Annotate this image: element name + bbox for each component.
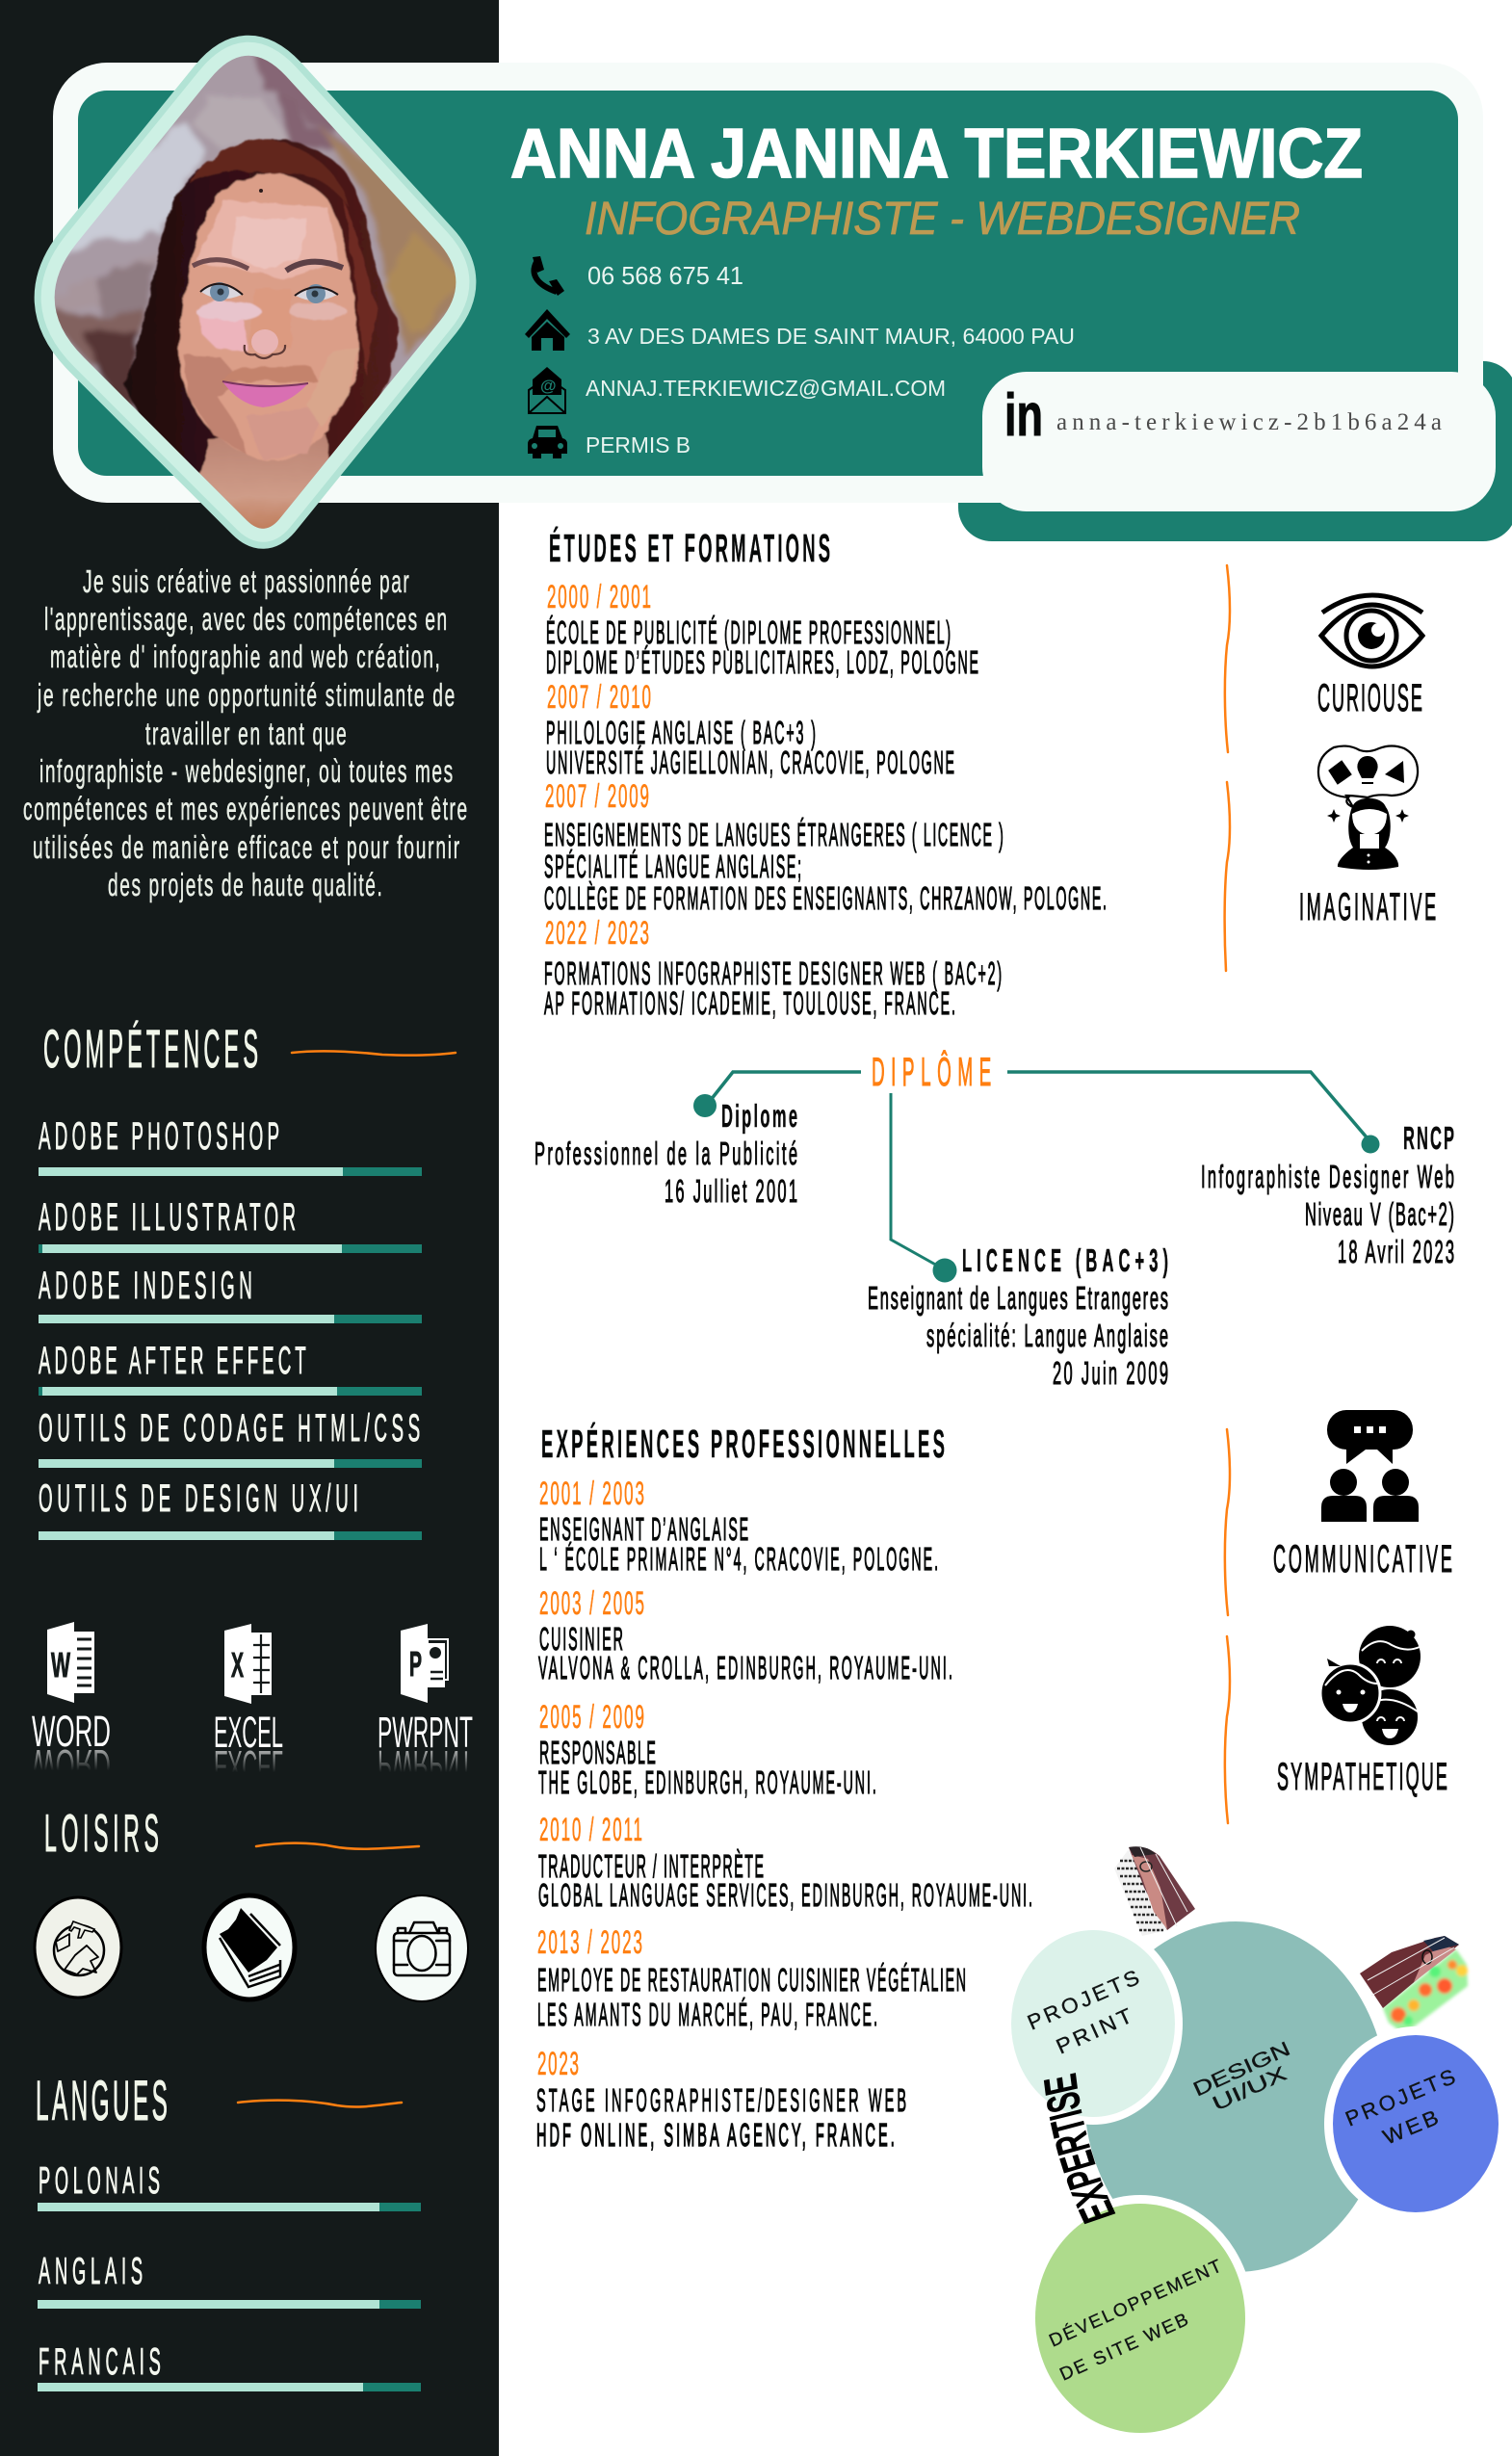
trait: sympathetique: SYMPATHETIQUE bbox=[1277, 1755, 1447, 1798]
job 2003-2005 bbox=[538, 1585, 952, 1686]
sidebar background bbox=[0, 0, 499, 2456]
circle: design ui/ux bbox=[1084, 1921, 1387, 2272]
trait: curiouse: CURIOUSE bbox=[1317, 676, 1422, 719]
icon: smiling faces bbox=[1320, 1626, 1421, 1746]
circle: développement: DE SITE WEB bbox=[1056, 2309, 1193, 2386]
icon: globe and plane bbox=[35, 1897, 121, 1998]
job subtitle: INFOGRAPHISTE - WEBDESIGNER bbox=[585, 194, 1300, 245]
study 2007-2010 bbox=[546, 679, 954, 781]
intro paragraph: je recherche une opportunité stimulante de bbox=[37, 678, 455, 713]
label: design ui/ux: UI/UX bbox=[1210, 2062, 1290, 2116]
icon: excel bbox=[224, 1624, 272, 1704]
portrait background bbox=[54, 56, 456, 529]
heading: études: ÉTUDES ET FORMATIONS bbox=[549, 526, 830, 570]
job 2013-2023: LES AMANTS DU MARCHÉ, PAU, FRANCE. bbox=[537, 1997, 877, 2033]
name title: ANNA JANINA TERKIEWICZ bbox=[510, 116, 1363, 193]
portrait illustration bbox=[54, 56, 456, 529]
language: anglais: ANGLAIS bbox=[39, 2250, 143, 2292]
intro paragraph bbox=[23, 564, 467, 902]
circle: projets print: PROJETS bbox=[1024, 1964, 1145, 2035]
circle: développement bbox=[1027, 2195, 1254, 2442]
diploma: licence: 20 Juin 2009 bbox=[1053, 1355, 1168, 1392]
heading: expériences: EXPÉRIENCES PROFESSIONNELLES bbox=[541, 1422, 945, 1466]
email address: ANNAJ.TERKIEWICZ@GMAIL.COM bbox=[586, 376, 946, 401]
studies section bbox=[544, 526, 1107, 1022]
circle: projets print bbox=[1004, 1922, 1183, 2125]
job 2003-2005: CUISINIER bbox=[539, 1622, 623, 1658]
diploma: publicité: Diplome bbox=[721, 1098, 797, 1135]
job 2023: HDF ONLINE, SIMBA AGENCY, FRANCE. bbox=[536, 2119, 895, 2154]
study 2000-2001: ÉCOLE DE PUBLICITÉ (DIPLOME PROFESSIONNEL) bbox=[546, 614, 951, 651]
reflection: word: WORD bbox=[32, 1740, 111, 1790]
label: design ui/ux bbox=[1190, 2038, 1293, 2116]
diploma: rncp: 18 Avril 2023 bbox=[1338, 1234, 1454, 1270]
diploma: publicité: Professionnel de la Publicité bbox=[534, 1136, 797, 1172]
intro paragraph: l'apprentissage, avec des compétences en bbox=[44, 602, 447, 637]
job 2010-2011: 2010 / 2011 bbox=[539, 1812, 642, 1848]
job 2005-2009: RESPONSABLE bbox=[539, 1736, 656, 1771]
icon: imagination bbox=[1318, 745, 1418, 870]
study 2007-2009 bbox=[544, 778, 1107, 917]
diploma: rncp bbox=[1201, 1120, 1454, 1270]
job 2023 bbox=[536, 2046, 906, 2154]
heading: langues: LANGUES bbox=[36, 2071, 168, 2132]
icon: car bbox=[528, 426, 567, 458]
study 2007-2010: PHILOLOGIE ANGLAISE ( BAC+3 ) bbox=[546, 716, 816, 751]
study 2007-2009: COLLÈGE DE FORMATION DES ENSEIGNANTS, CHRZANOW, POLOGNE. bbox=[544, 880, 1107, 917]
label: design ui/ux: DESIGN bbox=[1190, 2038, 1293, 2102]
diploma: rncp: Infographiste Designer Web bbox=[1201, 1159, 1454, 1195]
skill: illustrator: ADOBE ILLUSTRATOR bbox=[39, 1195, 296, 1239]
languages section bbox=[36, 2071, 421, 2391]
job 2010-2011 bbox=[538, 1812, 1032, 1914]
skill: after effect bbox=[39, 1339, 422, 1396]
job 2001-2003: 2001 / 2003 bbox=[539, 1476, 644, 1512]
LinkedIn logo: in bbox=[1004, 382, 1043, 449]
LinkedIn box bbox=[982, 372, 1496, 511]
job 2010-2011: TRADUCTEUR / INTERPRÈTE bbox=[538, 1848, 764, 1885]
icon: word bbox=[47, 1622, 94, 1703]
diploma timeline bbox=[534, 1048, 1454, 1392]
pale outer banner bbox=[53, 63, 1483, 503]
diploma: licence: LICENCE (BAC+3) bbox=[962, 1242, 1168, 1279]
icon: email: @ bbox=[540, 377, 557, 395]
intro paragraph: Je suis créative et passionnée par bbox=[83, 564, 409, 599]
phone number: 06 568 675 41 bbox=[587, 261, 743, 290]
study 2022-2023: AP FORMATIONS/ ICADEMIE, TOULOUSE, FRANCE. bbox=[544, 986, 955, 1022]
language: francais: FRANCAIS bbox=[39, 2340, 161, 2383]
job 2003-2005: 2003 / 2005 bbox=[539, 1585, 644, 1622]
skills section bbox=[39, 1019, 456, 1540]
portrait in rounded diamond frame bbox=[19, 29, 482, 549]
hair and skin bbox=[125, 139, 398, 549]
job 2023: STAGE INFOGRAPHISTE/DESIGNER WEB bbox=[536, 2084, 906, 2119]
job 2001-2003 bbox=[539, 1476, 938, 1578]
icon: books bbox=[204, 1895, 295, 1999]
office tools: EXCEL bbox=[214, 1708, 283, 1757]
language: polonais: POLONAIS bbox=[39, 2159, 160, 2202]
skill: html css: OUTILS DE CODAGE HTML/CSS bbox=[39, 1406, 420, 1450]
intro paragraph: compétences et mes expériences peuvent être bbox=[23, 792, 467, 826]
heading: diplôme: DIPLÔME bbox=[872, 1048, 991, 1094]
office tools bbox=[32, 1622, 473, 1790]
intro paragraph: travailler en tant que bbox=[145, 717, 347, 751]
job 2005-2009: THE GLOBE, EDINBURGH, ROYAUME-UNI. bbox=[538, 1765, 876, 1801]
curved label: expertise: EXPERTISE bbox=[1044, 2073, 1115, 2225]
icon: powerpoint bbox=[401, 1624, 448, 1703]
study 2022-2023 bbox=[544, 915, 1002, 1022]
diploma: rncp: RNCP bbox=[1403, 1120, 1454, 1157]
job 2005-2009 bbox=[538, 1699, 876, 1801]
study 2000-2001 bbox=[546, 579, 978, 681]
icon: word: W bbox=[51, 1645, 70, 1685]
icon: phone bbox=[533, 256, 564, 296]
diploma: publicité: 16 Julliet 2001 bbox=[665, 1173, 797, 1210]
skill: ux ui bbox=[39, 1476, 422, 1540]
icon: excel: X bbox=[231, 1645, 244, 1685]
intro paragraph: matière d' infographie and web création, bbox=[50, 640, 440, 674]
skill: photoshop: ADOBE PHOTOSHOP bbox=[39, 1114, 279, 1158]
icon: house bbox=[525, 309, 570, 351]
skill: after effect: ADOBE AFTER EFFECT bbox=[39, 1339, 306, 1382]
intro paragraph: utilisées de manière efficace et pour fournir bbox=[33, 830, 459, 865]
thumbnail: web portrait bbox=[1360, 1936, 1468, 2034]
study 2022-2023: FORMATIONS INFOGRAPHISTE DESIGNER WEB ( BAC+2) bbox=[544, 956, 1002, 992]
diploma: licence bbox=[868, 1242, 1168, 1392]
language: polonais bbox=[38, 2159, 421, 2211]
skill: ux ui: OUTILS DE DESIGN UX/UI bbox=[39, 1476, 358, 1520]
skill: illustrator bbox=[39, 1195, 422, 1253]
teal inner banner bbox=[78, 91, 1458, 476]
language: francais bbox=[38, 2340, 421, 2391]
icon: communication bbox=[1321, 1410, 1419, 1522]
job 2003-2005: VALVONA & CROLLA, EDINBURGH, ROYAUME-UNI. bbox=[538, 1651, 952, 1686]
skill: html css bbox=[39, 1406, 422, 1468]
heading: loisirs: LOISIRS bbox=[44, 1803, 159, 1863]
label: word: WORD bbox=[32, 1707, 111, 1756]
reflection: powerpoint: PWRPNT bbox=[378, 1741, 473, 1790]
study 2007-2009: 2007 / 2009 bbox=[545, 778, 649, 815]
circle: projets print: PRINT bbox=[1053, 2002, 1138, 2059]
study 2000-2001: DIPLOME D’ÉTUDES PUBLICITAIRES, LODZ, POLOGNE bbox=[546, 644, 978, 681]
address: 3 AV DES DAMES DE SAINT MAUR, 64000 PAU bbox=[587, 324, 1075, 349]
diploma: licence: Enseignant de Langues Etrangeres bbox=[868, 1280, 1168, 1317]
LinkedIn handle: anna-terkiewicz-2b1b6a24a bbox=[1056, 409, 1442, 435]
timeline connectors bbox=[711, 1072, 1368, 1267]
job 2001-2003: ENSEIGNANT D’ANGLAISE bbox=[539, 1512, 748, 1548]
job 2013-2023 bbox=[537, 1924, 966, 2033]
job 2023: 2023 bbox=[537, 2046, 579, 2082]
icon: powerpoint: P bbox=[409, 1644, 422, 1684]
study 2007-2010: 2007 / 2010 bbox=[547, 679, 651, 716]
diploma: licence: spécialité: Langue Anglaise bbox=[926, 1318, 1168, 1354]
job 2010-2011: GLOBAL LANGUAGE SERVICES, EDINBURGH, ROYAUME-UNI. bbox=[538, 1878, 1032, 1914]
driving licence: PERMIS B bbox=[586, 432, 691, 457]
header banner bbox=[53, 63, 1512, 541]
experience section bbox=[536, 1422, 1032, 2154]
skill: indesign: ADOBE INDESIGN bbox=[39, 1264, 252, 1307]
heading: compétences: COMPÉTENCES bbox=[43, 1019, 258, 1080]
job 2013-2023: EMPLOYE DE RESTAURATION CUISINIER VÉGÉTALIEN bbox=[537, 1962, 966, 1999]
intro paragraph: des projets de haute qualité. bbox=[108, 868, 382, 902]
icon: camera bbox=[376, 1895, 468, 2001]
job 2005-2009: 2005 / 2009 bbox=[539, 1699, 644, 1736]
language: anglais bbox=[38, 2250, 421, 2309]
job 2013-2023: 2013 / 2023 bbox=[537, 1924, 642, 1961]
circle: projets web: WEB bbox=[1379, 2103, 1445, 2150]
intro paragraph: infographiste - webdesigner, où toutes mes bbox=[39, 754, 453, 789]
trait separators bbox=[1225, 565, 1230, 752]
icon: eye bbox=[1321, 595, 1422, 666]
circle: développement: DÉVELOPPEMENT bbox=[1046, 2256, 1227, 2352]
study 2000-2001: 2000 / 2001 bbox=[547, 579, 651, 615]
trait: communicative: COMMUNICATIVE bbox=[1273, 1537, 1452, 1581]
circle: projets web: PROJETS bbox=[1342, 2063, 1461, 2131]
expertise diagram bbox=[1011, 1846, 1499, 2433]
icon: email bbox=[529, 367, 565, 413]
study 2022-2023: 2022 / 2023 bbox=[545, 915, 649, 952]
diamond frame bbox=[55, 56, 456, 529]
trait: imaginative: IMAGINATIVE bbox=[1299, 885, 1436, 928]
diploma: rncp: Niveau V (Bac+2) bbox=[1305, 1196, 1454, 1233]
label: powerpoint: PWRPNT bbox=[378, 1708, 473, 1757]
facial features bbox=[193, 189, 343, 407]
circle: projets web bbox=[1324, 2026, 1507, 2221]
teal back panel of LinkedIn box bbox=[958, 361, 1512, 541]
skill: photoshop bbox=[39, 1114, 422, 1176]
hobbies section bbox=[35, 1803, 468, 2001]
study 2007-2009: ENSEIGNEMENTS DE LANGUES ÉTRANGERES ( LICENCE ) bbox=[544, 817, 1004, 853]
study 2007-2009: SPÉCIALITÉ LANGUE ANGLAISE; bbox=[544, 849, 801, 885]
diploma: publicité bbox=[534, 1094, 797, 1210]
study 2007-2010: UNIVERSITÉ JAGIELLONIAN, CRACOVIE, POLOGNE bbox=[546, 745, 954, 781]
skill: indesign bbox=[39, 1264, 422, 1323]
thumbnail: print portrait bbox=[1114, 1846, 1195, 1936]
office tools: EXCEL bbox=[214, 1741, 283, 1790]
job 2001-2003: L ‘ ÉCOLE PRIMAIRE N°4, CRACOVIE, POLOGNE. bbox=[539, 1541, 938, 1578]
